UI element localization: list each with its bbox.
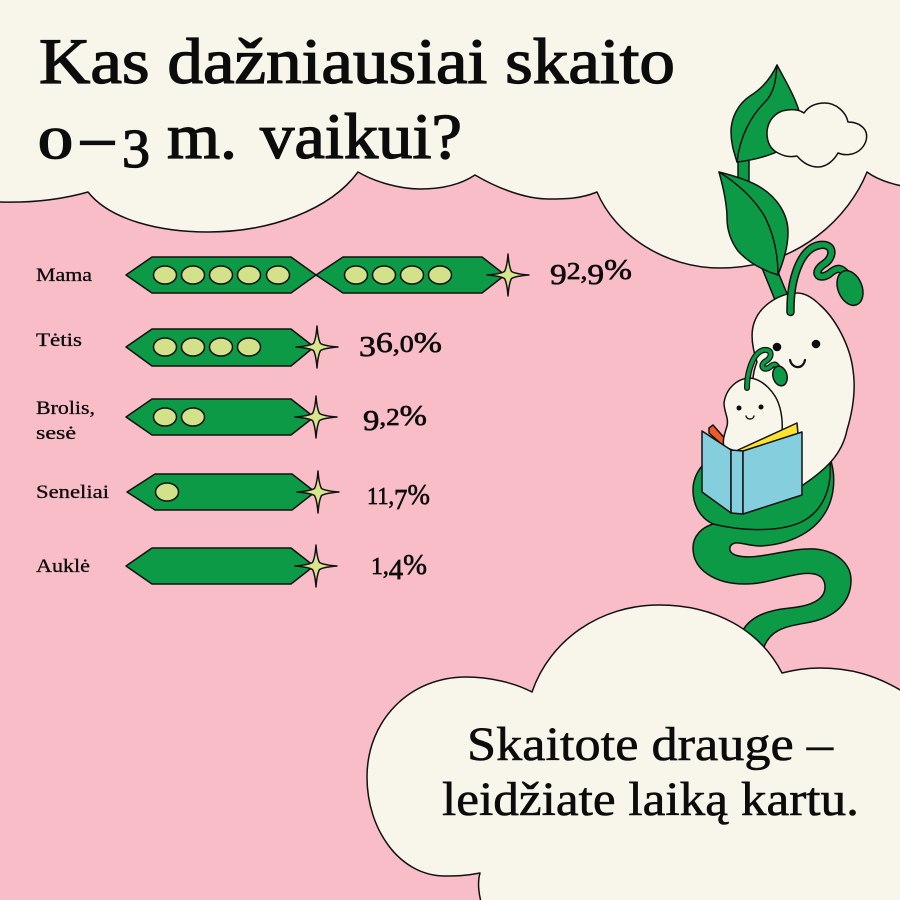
big bean [752, 293, 854, 486]
bar row: Mama: Mama [36, 266, 92, 286]
bar row: Tėtis: Tėtis [36, 331, 82, 351]
bar row: Seneliai [36, 471, 430, 516]
lower leaf [719, 172, 788, 275]
bar row: Auklė: 1, [371, 554, 389, 580]
lower leaf vein [719, 172, 778, 275]
title: – [80, 101, 115, 173]
bar row: Tėtis [36, 326, 442, 368]
title: m. [167, 101, 237, 173]
small cloud [767, 103, 867, 167]
small bean eye left [736, 406, 742, 410]
bar row: Seneliai: % [408, 479, 430, 511]
small bean [723, 378, 782, 452]
bar row: Auklė: 4 [389, 554, 404, 586]
bar row: Tėtis: 3 [359, 331, 376, 363]
title: vaikui? [260, 101, 462, 173]
slogan: Skaitote drauge – [467, 718, 834, 771]
yellow book page [738, 423, 798, 452]
bar row: Tėtis: ,0% [393, 327, 438, 359]
bar row: Auklė: Auklė [36, 557, 90, 577]
big bean eye left [773, 343, 781, 351]
bar row: Brolis, sesė: sesė [36, 424, 76, 444]
small bean smile [746, 416, 754, 419]
lower stem [762, 268, 788, 300]
vine [693, 458, 851, 668]
bar row: Brolis, sesė [36, 396, 427, 444]
bar row: Brolis, sesė: 9 [363, 405, 379, 437]
upper leaf vein [737, 65, 777, 162]
small tendril [747, 350, 778, 388]
bar row: Seneliai: 7 [394, 484, 408, 516]
small bean eye right [758, 404, 764, 410]
book [702, 431, 802, 514]
bar row: Auklė: % [403, 549, 427, 581]
bar row: Mama: 9 [587, 259, 604, 291]
title: Kas dažniausiai skaito [39, 26, 675, 98]
slogan: leidžiate laiką kartu. [442, 773, 859, 826]
bar row: Brolis, sesė: Brolis, [36, 399, 95, 419]
upper leaf [731, 65, 800, 162]
bar row: Auklė [36, 545, 427, 587]
bar row: Seneliai: Seneliai [36, 483, 109, 503]
bar row: Mama: % [604, 254, 632, 286]
orange book page [709, 425, 734, 450]
top cloud background [0, 0, 900, 268]
bar row: Mama: 2, [567, 259, 587, 285]
big tendril pod [832, 267, 868, 309]
title: 0 [38, 119, 73, 168]
small tendril pod [771, 365, 789, 387]
bar row: Tėtis: 6 [376, 327, 393, 359]
big tendril [790, 245, 848, 312]
big bean smile [790, 360, 805, 367]
title [38, 26, 675, 179]
vine coil line [713, 462, 830, 530]
upper stem [738, 158, 749, 188]
title: 3 [122, 118, 150, 179]
big bean eye right [812, 340, 820, 348]
illustration: bean plant reading a book [693, 65, 868, 668]
bottom cloud background [367, 605, 900, 900]
bar row: Brolis, sesė: ,2 [379, 405, 400, 431]
bar row: Brolis, sesė: % [400, 400, 427, 432]
bar row: Mama [36, 254, 632, 296]
bar row: Seneliai: 11, [367, 484, 394, 510]
slogan [442, 718, 859, 826]
bar row: Mama: 9 [550, 259, 567, 291]
